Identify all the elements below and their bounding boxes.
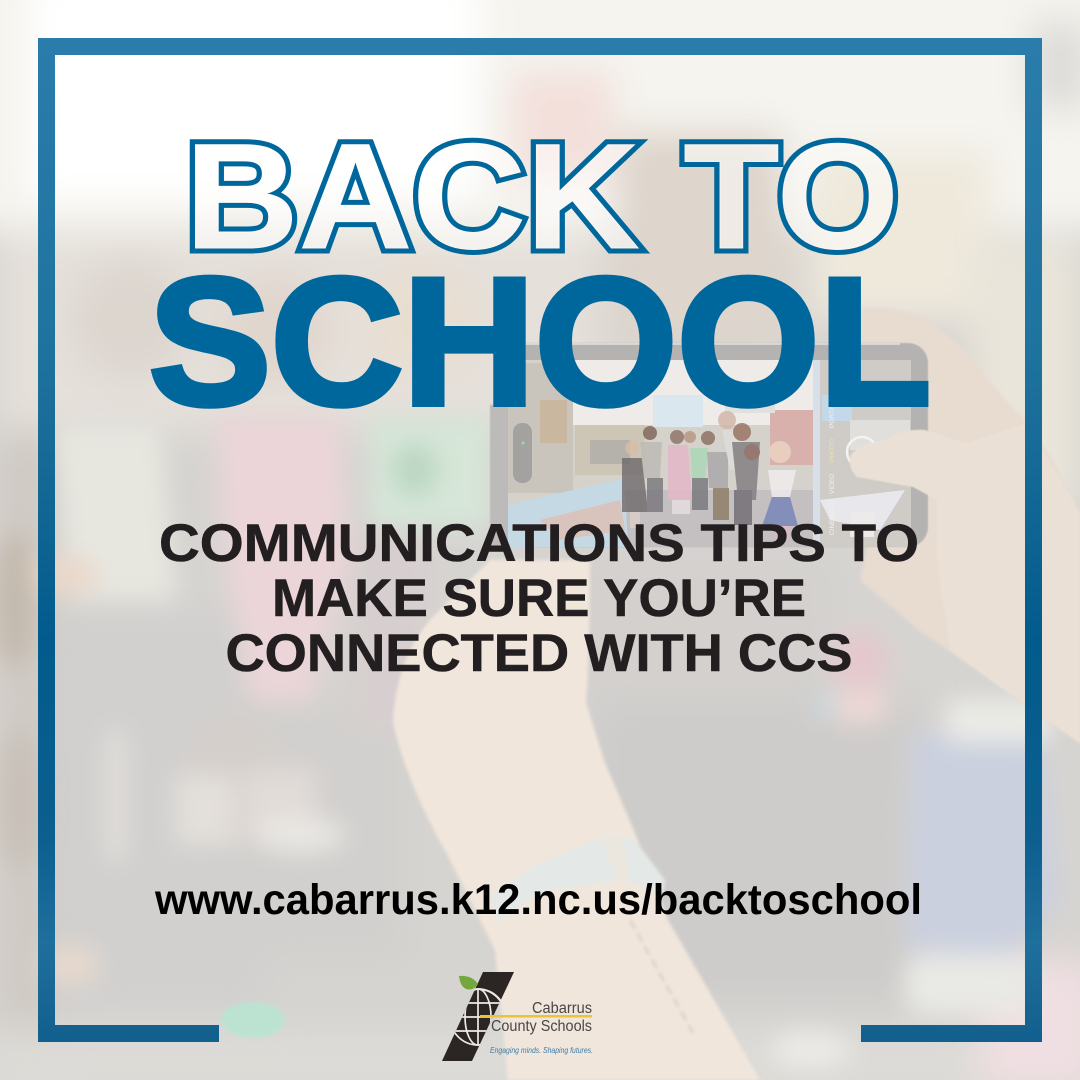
- logo name: Cabarrus: [532, 1000, 592, 1017]
- logo gold line: [480, 1015, 592, 1018]
- subtitle: COMMUNICATIONS TIPS TO: [159, 514, 919, 573]
- hand holding phone: right hand behind phone: [827, 308, 1080, 743]
- phone camera mode labels: PANO: [829, 367, 836, 385]
- green floor disc: [221, 1002, 285, 1038]
- logo name: County Schools: [491, 1018, 592, 1035]
- phone: [508, 343, 928, 550]
- phone camera mode labels: VIDEO: [829, 474, 836, 494]
- thumb over phone: [850, 423, 1080, 743]
- logo tagline: Engaging minds. Shaping futures.: [490, 1045, 593, 1055]
- phone camera mode labels: [829, 367, 836, 535]
- logo name: [491, 1000, 592, 1035]
- logo: Cabarrus County Schools: [442, 972, 593, 1061]
- subtitle: [159, 514, 919, 683]
- title: BACK TO: BACK TO: [185, 112, 899, 280]
- shutter button: [847, 437, 877, 467]
- subtitle: CONNECTED WITH CCS: [226, 624, 852, 683]
- website url: www.cabarrus.k12.nc.us/backtoschool: [154, 876, 922, 924]
- children in phone screen: [622, 411, 798, 540]
- subtitle: MAKE SURE YOU’RE: [272, 569, 806, 628]
- phone camera mode labels: CINEMATIC: [829, 499, 836, 535]
- title: BACK TO: [190, 138, 898, 255]
- hand holding phone: left hand and wrist: [393, 560, 760, 1080]
- logo leaf: [459, 976, 478, 989]
- phone slider pill: [513, 423, 532, 483]
- phone camera mode labels: PORTRAIT: [829, 395, 836, 428]
- phone camera mode labels: PHOTO: [829, 439, 836, 462]
- logo slash with globe: [442, 972, 514, 1061]
- title: SCHOOL: SCHOOL: [149, 241, 931, 443]
